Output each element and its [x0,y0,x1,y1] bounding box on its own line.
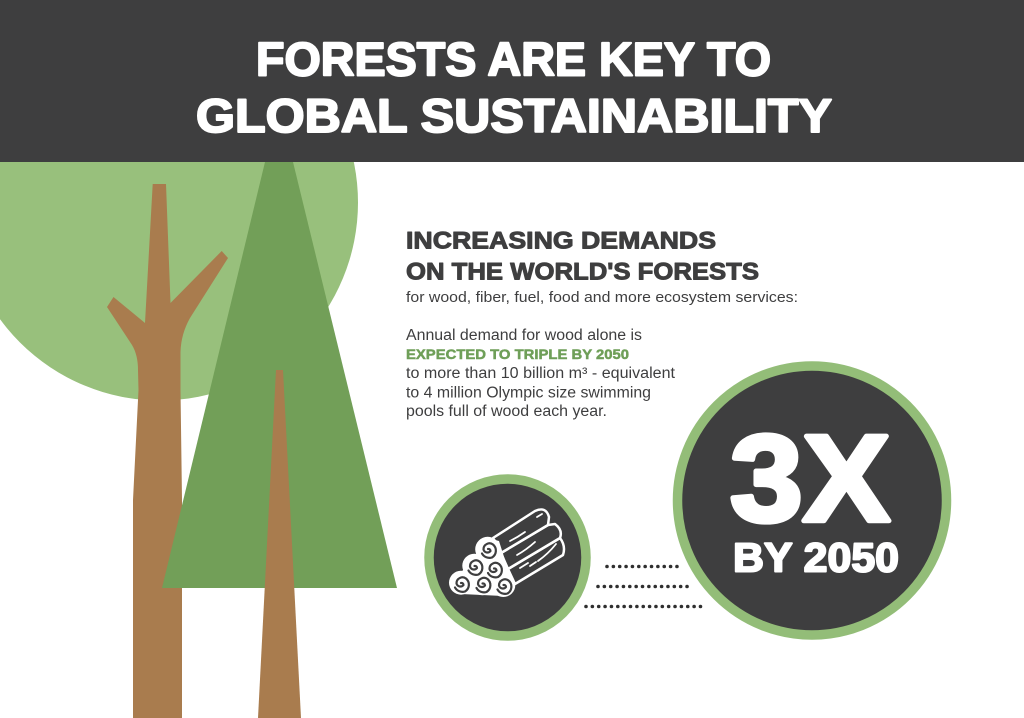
header band [0,0,1024,162]
pine tree illustration [162,162,397,718]
by 2050 label: BY 2050 [733,534,899,580]
title [196,34,832,143]
heading: increasing demands [406,228,759,286]
pine foliage [162,162,397,588]
body paragraph: pools full of wood each year. [406,403,607,420]
green highlight: EXPECTED TO TRIPLE BY 2050 [406,346,629,362]
deciduous tree illustration [0,4,358,718]
body paragraph [406,327,676,420]
badge: logs icon [429,479,586,636]
dotted connector [586,566,702,606]
title: FORESTS ARE KEY TO [256,34,771,87]
tree canopy [0,4,358,400]
log end blob [452,538,513,596]
body paragraph: Annual demand for wood alone is [406,327,642,344]
log end spirals [455,543,511,594]
title: GLOBAL SUSTAINABILITY [196,90,832,143]
body paragraph: to 4 million Olympic size swimming [406,384,651,402]
body paragraph: to more than 10 billion m³ - equivalent [406,365,676,382]
big number: 3X [730,411,890,548]
icon: bundle of logs [449,509,564,597]
subheading: for wood, fiber, fuel, food and more ecosystem services: [406,289,798,306]
heading: increasing demands: INCREASING DEMANDS [406,228,716,255]
badge: 3X by 2050 [678,366,946,635]
tree trunk with branches [107,184,228,718]
pine trunk [258,370,301,718]
heading: increasing demands: ON THE WORLD'S FORESTS [406,258,759,286]
wood grain cracks [510,514,556,568]
